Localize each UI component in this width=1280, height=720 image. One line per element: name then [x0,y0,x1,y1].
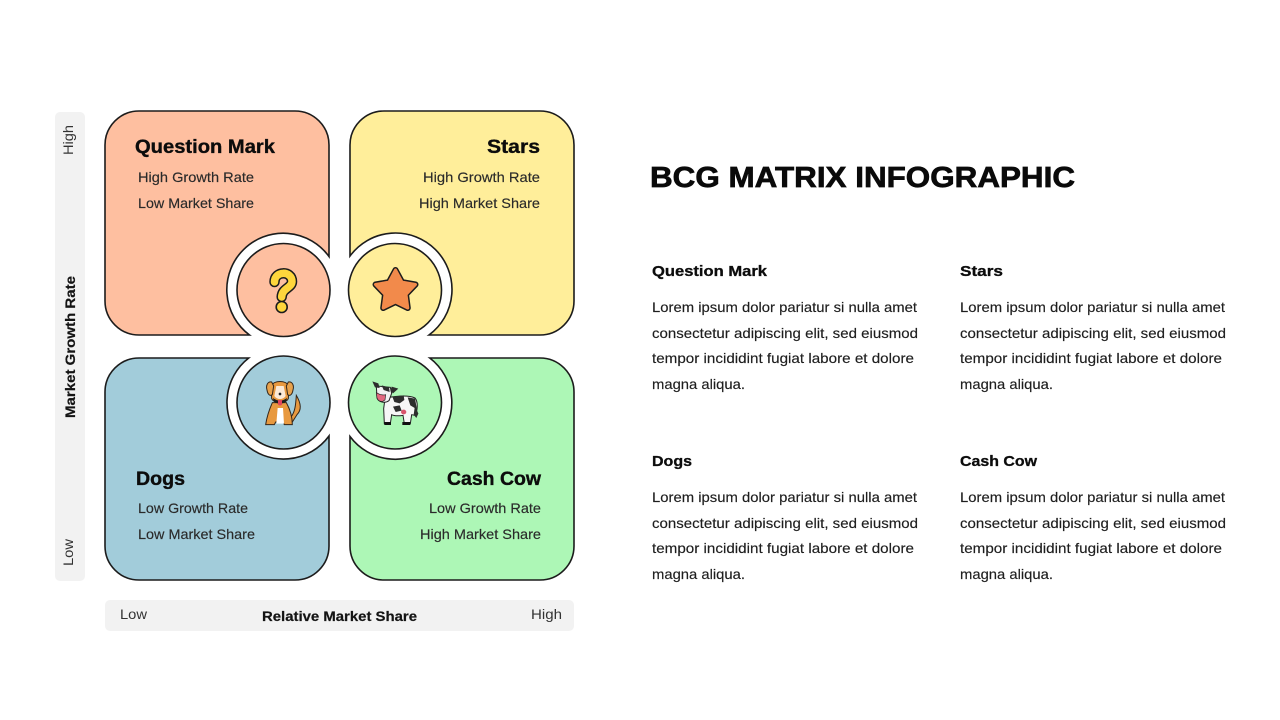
panel: cash cow: Low Growth Rate [429,500,541,516]
text block: cash cow: Cash Cow [960,453,1037,470]
vertical axis: market growth rate [55,112,85,581]
icon: dog [266,381,300,425]
panel: dogs: Low Market Share [138,526,255,542]
text block: question mark [652,263,918,392]
icon: cow [372,381,418,425]
panel: stars [348,111,574,336]
text block: cash cow: consectetur adipiscing elit, sed eiusmod [960,515,1226,531]
horizontal axis: relative market share: High [531,606,562,622]
text block: stars: tempor incididint fugiat labore et dolore [960,350,1222,366]
panel: stars: High Growth Rate [423,169,540,185]
text block: dogs: consectetur adipiscing elit, sed eiusmod [652,515,918,531]
vertical axis: market growth rate: Low [60,538,76,566]
panel: stars: Stars [487,137,540,158]
text block: cash cow: tempor incididint fugiat labore et dolore [960,540,1222,556]
panel: dogs [105,356,330,580]
text block: question mark: Lorem ipsum dolor pariatur si nulla amet [652,299,917,315]
horizontal axis: relative market share: Low [120,606,148,622]
text block: stars: consectetur adipiscing elit, sed eiusmod [960,325,1226,341]
panel: dogs: Dogs [136,469,185,490]
text block: stars: Lorem ipsum dolor pariatur si nulla amet [960,299,1225,315]
text block: dogs: tempor incididint fugiat labore et dolore [652,540,914,556]
text block: question mark: tempor incididint fugiat labore et dolore [652,350,914,366]
horizontal axis: relative market share: Relative Market Share [262,609,418,624]
vertical axis: market growth rate: Market Growth Rate [63,275,78,418]
panel: question mark: Low Market Share [138,195,254,211]
icon: star [376,270,416,308]
panel: cash cow: High Market Share [420,526,541,542]
text block: stars: magna aliqua. [960,376,1053,392]
panel: stars: High Market Share [419,195,540,211]
horizontal axis: relative market share [105,600,574,631]
vertical axis: market growth rate: High [60,125,76,155]
panel: question mark: High Growth Rate [138,169,254,185]
icon: question mark [274,273,292,312]
title: BCG MATRIX INFOGRAPHIC [650,162,1075,194]
text block: dogs [652,453,918,582]
text block: dogs: Dogs [652,453,692,470]
text block: question mark: consectetur adipiscing elit, sed eiusmod [652,325,918,341]
text block: stars [960,263,1226,392]
panel: question mark [105,111,330,336]
text block: question mark: magna aliqua. [652,376,745,392]
text block: question mark: Question Mark [652,263,768,280]
panel: question mark: Question Mark [135,137,275,158]
panel: cash cow: Cash Cow [447,469,541,490]
text block: stars: Stars [960,263,1003,280]
text block: cash cow [960,453,1226,582]
panel: cash cow [348,356,574,580]
panel: dogs: Low Growth Rate [138,500,248,516]
text block: dogs: Lorem ipsum dolor pariatur si nulla amet [652,489,917,505]
text block: cash cow: magna aliqua. [960,566,1053,582]
text block: dogs: magna aliqua. [652,566,745,582]
text block: cash cow: Lorem ipsum dolor pariatur si nulla amet [960,489,1225,505]
